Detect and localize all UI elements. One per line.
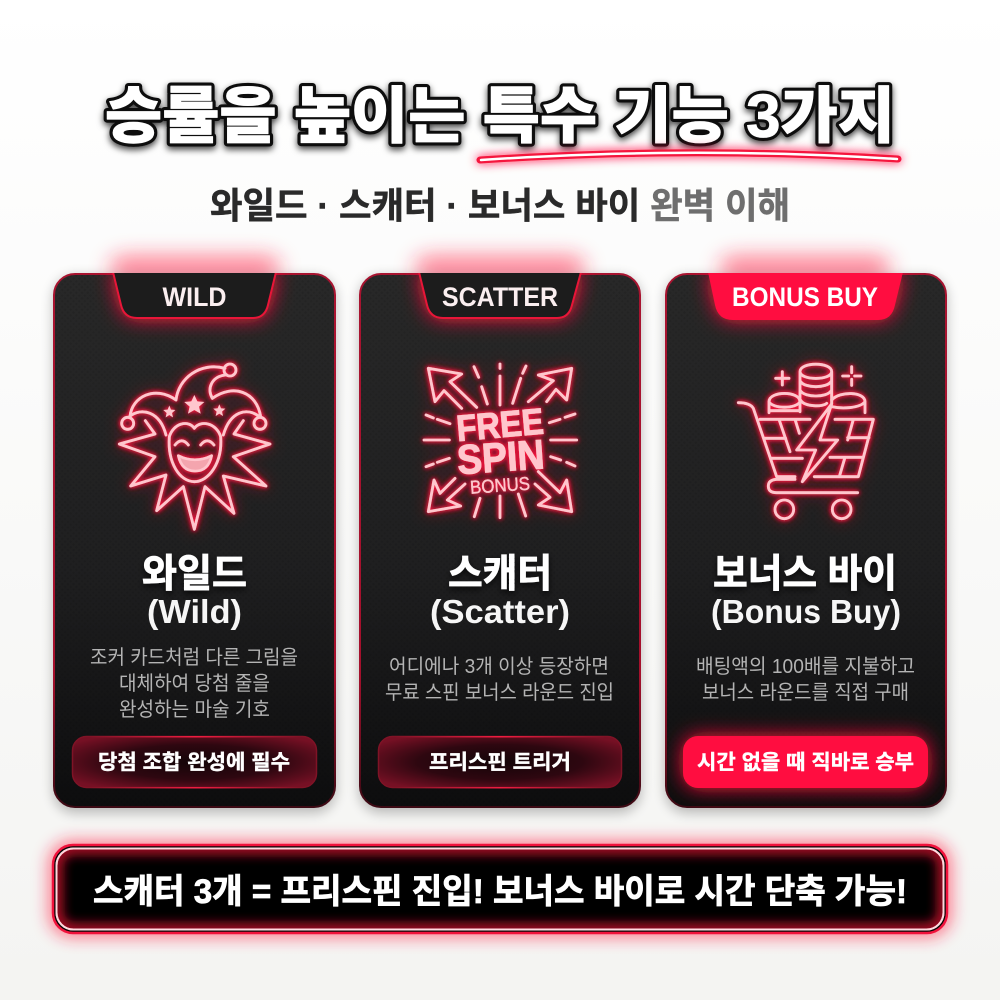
icon: jester	[119, 364, 270, 529]
description: bonus buy: 보너스 라운드를 직접 구매	[702, 681, 909, 704]
tab: wild	[113, 272, 276, 318]
button: bonus buy	[683, 736, 928, 788]
tab: bonus buy	[708, 272, 903, 320]
bottom banner	[48, 840, 952, 938]
description: scatter	[385, 655, 614, 704]
tab: scatter	[419, 272, 581, 318]
title: 승률을 높이는 특수 기능 3가지	[105, 82, 895, 150]
icon: free spin burst	[424, 364, 577, 518]
icon: free spin burst: SPIN	[456, 431, 546, 483]
description: scatter: 무료 스핀 보너스 라운드 진입	[385, 681, 614, 704]
heading: scatter: 스캐터	[448, 553, 552, 596]
icon: free spin burst: BONUS	[469, 473, 531, 498]
description: wild: 조커 카드처럼 다른 그림을	[90, 646, 298, 669]
description: wild: 완성하는 마술 기호	[119, 698, 270, 721]
icon: shopping cart with coins	[738, 364, 873, 519]
button: scatter	[378, 736, 622, 788]
heading: wild: 와일드	[142, 553, 247, 596]
subheading: wild: (Wild)	[147, 593, 242, 630]
title underline	[480, 153, 898, 160]
button: bonus buy: 시간 없을 때 직바로 승부	[697, 751, 914, 774]
icon: free spin burst: FREE	[455, 401, 545, 449]
description: bonus buy	[696, 655, 915, 704]
button: scatter: 프리스핀 트리거	[429, 751, 571, 774]
panel: scatter	[359, 256, 641, 813]
description: scatter: 어디에나 3개 이상 등장하면	[389, 655, 609, 678]
button: wild	[72, 736, 316, 788]
description: wild: 대체하여 당첨 줄을	[119, 672, 270, 695]
description: wild	[90, 646, 298, 721]
button: wild: 당첨 조합 완성에 필수	[98, 751, 290, 774]
heading: bonus buy: 보너스 바이	[713, 553, 897, 596]
panel: bonus buy	[665, 256, 947, 813]
banner text: 스캐터 3개 = 프리스핀 진입! 보너스 바이로 시간 단축 가능!	[93, 873, 907, 911]
tab: scatter: SCATTER	[442, 282, 558, 312]
tab: bonus buy: BONUS BUY	[732, 282, 878, 312]
subheading: scatter: (Scatter)	[430, 593, 570, 630]
subtitle: 와일드 · 스캐터 · 보너스 바이 완벽 이해	[210, 185, 790, 226]
subheading: bonus buy: (Bonus Buy)	[711, 593, 901, 630]
title: 승률을 높이는 특수 기능 3가지	[105, 82, 895, 150]
tab: wild: WILD	[162, 282, 226, 312]
description: bonus buy: 배팅액의 100배를 지불하고	[696, 655, 915, 678]
panel: wild	[53, 256, 336, 813]
